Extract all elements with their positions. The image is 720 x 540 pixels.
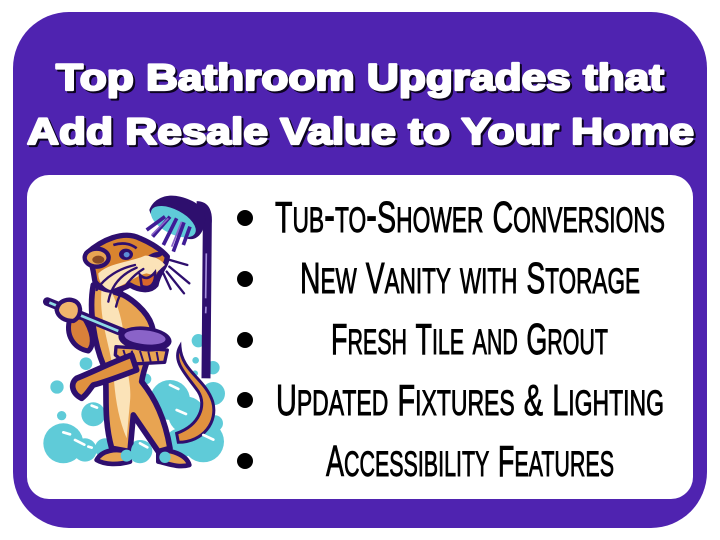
title: Top Bathroom Upgrades that xyxy=(58,59,666,100)
shower pole and head xyxy=(146,196,207,378)
list item 5 xyxy=(237,431,614,487)
belly xyxy=(101,288,130,438)
list item 3: Fresh Tile and Grout xyxy=(331,309,608,365)
title: Add Resale Value to Your Home xyxy=(29,113,696,154)
otter body xyxy=(92,285,170,452)
bubble highlights xyxy=(63,385,213,448)
list item 2: New Vanity with Storage xyxy=(300,248,640,304)
whiskers xyxy=(97,260,189,307)
hand gripping brush xyxy=(57,300,80,321)
upper arm xyxy=(69,317,92,351)
title xyxy=(27,57,696,154)
foreground bubbles xyxy=(121,440,171,463)
illustration: otter in the shower xyxy=(43,196,225,466)
lower arm xyxy=(73,355,137,398)
bullet list xyxy=(237,187,665,487)
list item 5: Accessibility Features xyxy=(326,431,614,487)
head xyxy=(85,235,167,290)
brush xyxy=(47,302,173,364)
list item 4: Updated Fixtures & Lighting xyxy=(276,370,664,426)
panel: white content card xyxy=(27,175,693,499)
title: Top Bathroom Upgrades that xyxy=(56,57,664,98)
list item 3 xyxy=(237,309,608,365)
feet xyxy=(97,450,189,466)
title: Add Resale Value to Your Home xyxy=(27,111,694,152)
foam bubbles xyxy=(43,334,225,463)
tail xyxy=(177,347,214,442)
